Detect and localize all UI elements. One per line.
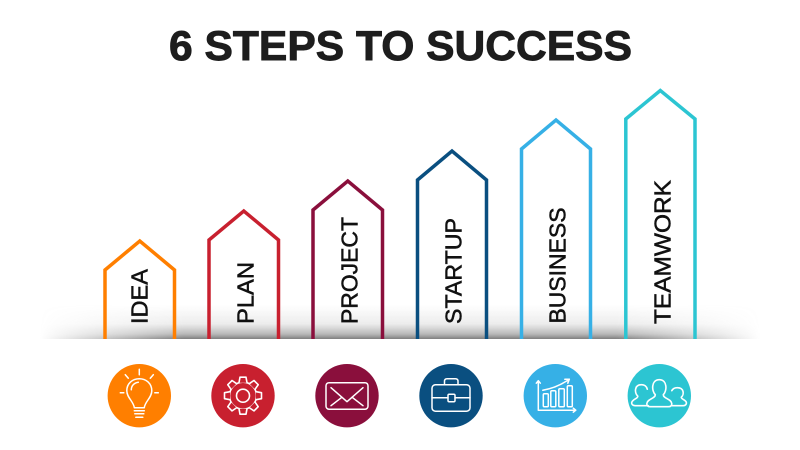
icon: bar chart [524, 364, 587, 427]
icon: envelope [315, 364, 379, 427]
icon: light bulb [108, 364, 171, 427]
arrow: startup [418, 151, 486, 339]
arrow: teamwork: TEAMWORK [650, 180, 676, 324]
arrow: idea: IDEA [126, 269, 152, 324]
arrow: plan [209, 211, 278, 339]
icon: gear [211, 364, 275, 427]
arrow: business [522, 120, 590, 339]
arrow: idea [105, 241, 174, 339]
arrow: plan: PLAN [232, 262, 258, 324]
arrow: business: BUSINESS [544, 208, 570, 324]
icon: team [628, 364, 691, 427]
icon: briefcase [419, 364, 483, 427]
arrow: teamwork [626, 90, 695, 339]
arrow: startup: STARTUP [440, 218, 466, 324]
arrow: project: PROJECT [336, 217, 362, 324]
title: 6 STEPS TO SUCCESS [169, 22, 632, 69]
floor shadow [50, 313, 750, 339]
arrow: project [313, 181, 382, 339]
